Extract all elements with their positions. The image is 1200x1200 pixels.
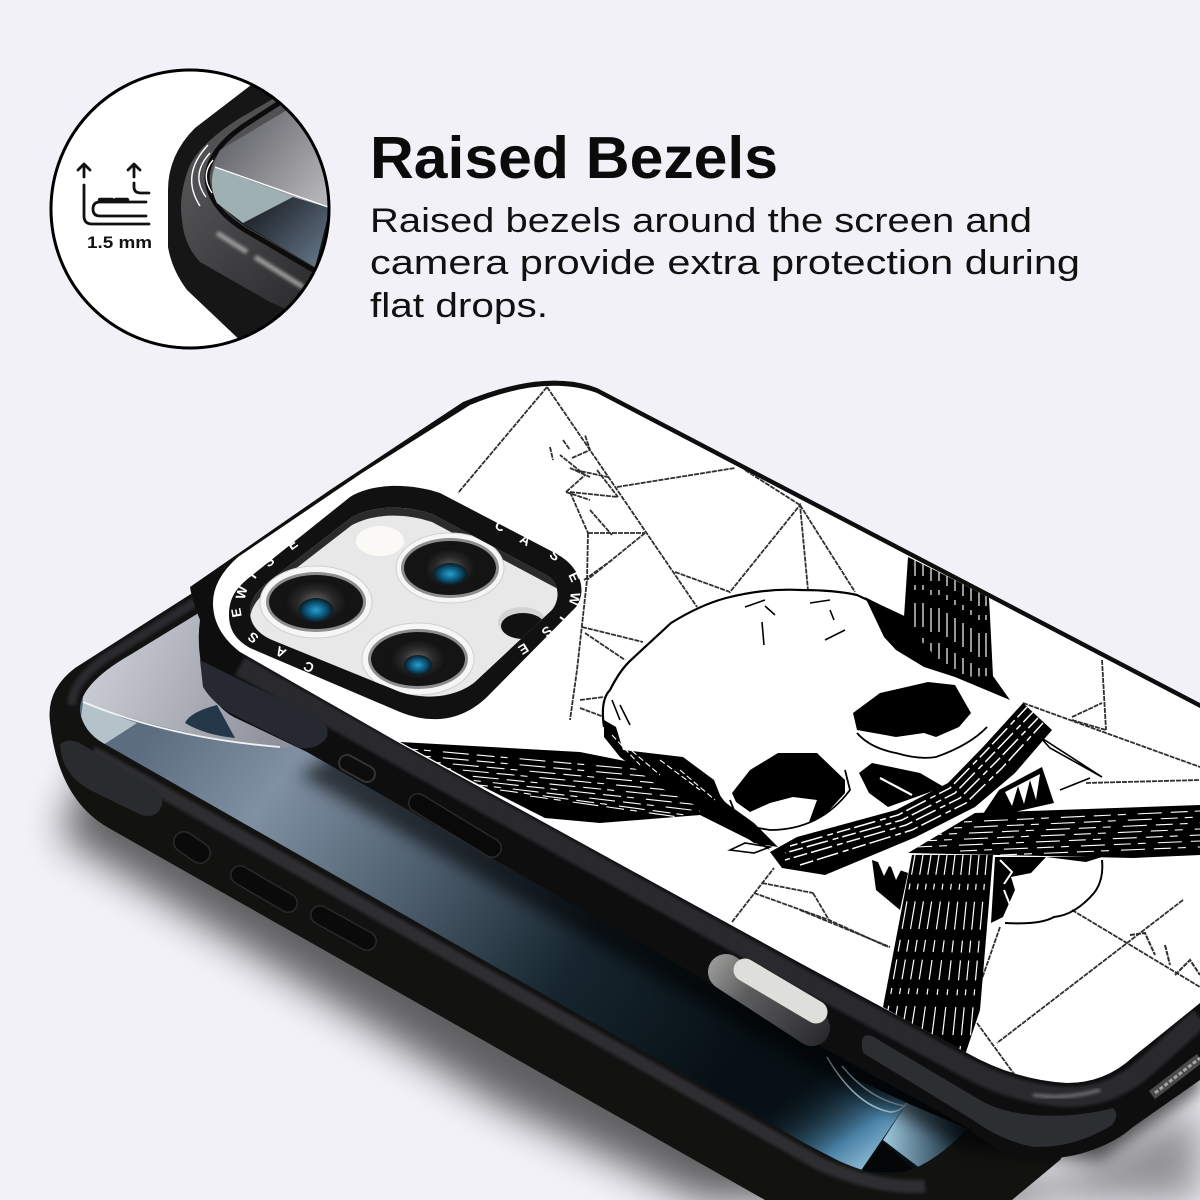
CASEWISE lettering on camera bezel: E: [565, 570, 583, 584]
nose cavity: [859, 763, 944, 807]
flash: [356, 526, 404, 556]
back phone bumper: [60, 741, 162, 816]
back phone rim highlight: [92, 752, 925, 1187]
cranium speckles: [612, 600, 845, 725]
callout: bezel close-up circle: [51, 70, 340, 348]
speaker grille: [1152, 1058, 1200, 1095]
skull left shadow: [604, 720, 778, 847]
back phone body: [50, 570, 1100, 1200]
front phone bumper bottom right: [862, 1035, 1116, 1147]
CASEWISE lettering on camera bezel: W: [233, 584, 251, 601]
front phone buttons: [347, 763, 492, 848]
teeth and jaw: [730, 737, 1102, 923]
charging port: [726, 970, 816, 1028]
white case back: [213, 386, 1200, 1083]
CASEWISE lettering on camera bezel: [228, 517, 583, 676]
CASEWISE lettering on camera bezel: C: [301, 658, 317, 676]
right eye socket: [853, 682, 971, 737]
title: Raised Bezels: [370, 125, 778, 191]
right wood bone: [908, 805, 1200, 858]
shadow under phones: [38, 764, 1200, 1200]
CASEWISE lettering on camera bezel: W: [566, 591, 583, 607]
CASEWISE lettering on camera bezel: A: [517, 531, 533, 549]
camera well: [250, 508, 558, 697]
description text: [370, 202, 1080, 325]
left wood bone: [400, 742, 770, 850]
CASEWISE lettering on camera bezel: S: [261, 553, 277, 570]
icon: raised bezel diagram: [78, 164, 149, 224]
camera module: [229, 486, 581, 719]
back phone buttons: [184, 842, 367, 941]
artwork: skull and crossbones with web: [400, 387, 1200, 1078]
CASEWISE lettering on camera bezel: S: [539, 623, 555, 640]
lens 3: [362, 623, 474, 695]
CASEWISE lettering on camera bezel: E: [516, 640, 531, 658]
CASEWISE lettering on camera bezel: I: [556, 614, 571, 625]
lower wood bone: [883, 855, 993, 1055]
camera bezel ring: [229, 486, 581, 719]
lens 2: [396, 533, 504, 603]
binding strap: [770, 703, 1052, 875]
front phone rim: [240, 666, 1200, 1097]
lens 1: [260, 566, 372, 638]
left eye socket: [732, 753, 845, 822]
CASEWISE lettering on camera bezel: E: [228, 607, 245, 619]
spider web lines: [458, 387, 1200, 1078]
eye socket outlines: [730, 727, 987, 830]
front phone bumper left: [200, 660, 328, 748]
CASEWISE lettering on camera bezel: S: [547, 547, 563, 564]
label: 1.5 mm: 1.5 mm: [87, 233, 152, 252]
description text: flat drops.: [370, 287, 548, 325]
screen of back phone: [80, 614, 967, 1174]
upper wood bone: [865, 557, 1010, 700]
description text: Raised bezels around the screen and: [370, 202, 1032, 240]
CASEWISE lettering on camera bezel: E: [284, 536, 300, 553]
CASEWISE lettering on camera bezel: C: [492, 517, 508, 535]
CASEWISE lettering on camera bezel: I: [245, 570, 260, 581]
front phone body: [190, 381, 1200, 1160]
microphone hole: [498, 607, 546, 639]
skull cranium: [604, 716, 605, 717]
CASEWISE lettering on camera bezel: A: [273, 643, 289, 661]
description text: camera provide extra protection during: [370, 244, 1080, 282]
CASEWISE lettering on camera bezel: S: [245, 629, 261, 646]
